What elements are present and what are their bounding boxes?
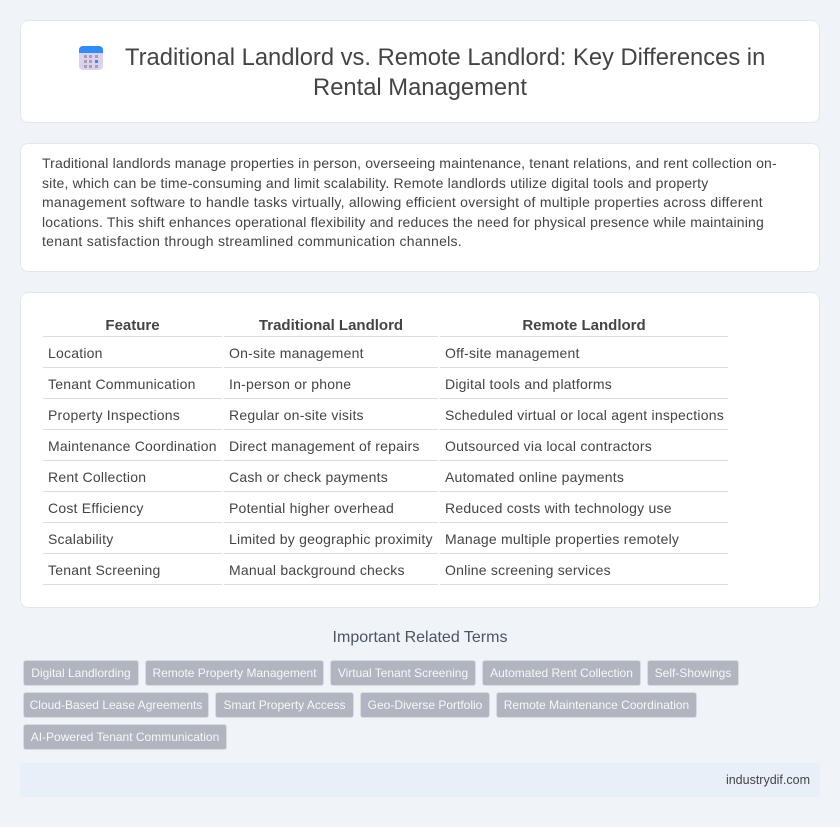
comparison table: Location — [48, 345, 103, 361]
footer source text: industrydif.com — [726, 773, 810, 787]
comparison table: Cost Efficiency — [48, 500, 144, 516]
comparison table: Remote Landlord — [522, 317, 646, 334]
related term tags: Cloud-Based Lease Agreements — [30, 698, 202, 712]
intro panel — [20, 143, 820, 272]
table panel — [20, 292, 820, 608]
title: Traditional Landlord vs. Remote Landlord: Key Differences in — [125, 44, 765, 71]
title: Rental Management — [313, 74, 527, 101]
comparison table: On-site management — [229, 345, 364, 361]
comparison table: Property Inspections — [48, 407, 180, 423]
comparison table: Outsourced via local contractors — [445, 438, 652, 454]
intro text — [42, 155, 777, 249]
comparison table: Potential higher overhead — [229, 500, 394, 516]
comparison table: Off-site management — [445, 345, 580, 361]
related term tags: Automated Rent Collection — [490, 666, 633, 680]
related term tags: Virtual Tenant Screening — [338, 666, 468, 680]
intro text: site, which can be time-consuming and limit scalability. Remote landlords utilize digital tools and property — [42, 175, 708, 191]
related term tags: Remote Maintenance Coordination — [504, 698, 689, 712]
comparison table: Traditional Landlord — [259, 317, 403, 334]
comparison table: Cash or check payments — [229, 469, 388, 485]
icon: calendar — [79, 46, 103, 70]
comparison table: Regular on-site visits — [229, 407, 364, 423]
header panel — [20, 20, 820, 123]
related term tags: Self-Showings — [655, 666, 731, 680]
comparison table: Maintenance Coordination — [48, 438, 217, 454]
comparison table: Automated online payments — [445, 469, 624, 485]
related term tags: Digital Landlording — [31, 666, 131, 680]
related term tags — [23, 660, 739, 750]
comparison table: Digital tools and platforms — [445, 376, 612, 392]
title — [125, 44, 765, 101]
related term tags: Geo-Diverse Portfolio — [368, 698, 482, 712]
intro text: Traditional landlords manage properties in person, overseeing maintenance, tenant relations, and rent collection on- — [42, 155, 777, 171]
comparison table: Direct management of repairs — [229, 438, 420, 454]
footer bar — [20, 763, 820, 797]
intro text: locations. This shift enhances operational flexibility and reduces the need for physical presence while maintaining — [42, 214, 764, 230]
comparison table: Scalability — [48, 531, 113, 547]
related term tags: Smart Property Access — [223, 698, 346, 712]
comparison table: Rent Collection — [48, 469, 146, 485]
comparison table: Tenant Communication — [48, 376, 196, 392]
intro text: tenant satisfaction through streamlined communication channels. — [42, 233, 462, 249]
comparison table: In-person or phone — [229, 376, 351, 392]
related terms heading: Important Related Terms — [333, 629, 507, 646]
comparison table — [43, 317, 728, 585]
related term tags: Remote Property Management — [152, 666, 317, 680]
intro text: management software to handle tasks virtually, allowing efficient oversight of multiple properties across different — [42, 194, 763, 210]
comparison table: Limited by geographic proximity — [229, 531, 433, 547]
comparison table: Online screening services — [445, 562, 611, 578]
related term tags: AI-Powered Tenant Communication — [31, 730, 219, 744]
comparison table: Tenant Screening — [48, 562, 160, 578]
comparison table: Feature — [105, 317, 160, 334]
comparison table: Manage multiple properties remotely — [445, 531, 679, 547]
comparison table: Reduced costs with technology use — [445, 500, 672, 516]
comparison table: Scheduled virtual or local agent inspections — [445, 407, 724, 423]
comparison table: Manual background checks — [229, 562, 405, 578]
